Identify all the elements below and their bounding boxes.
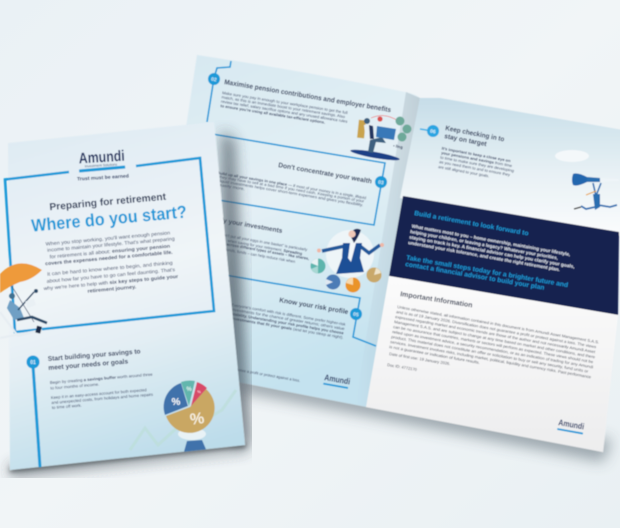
step 02 body text: match, as this is an immediate boost to your retirement savings. Also xyxy=(221,94,345,119)
step 02 heading: Maximise pension contributions and employer benefits xyxy=(224,79,392,114)
pie chart: % xyxy=(197,389,201,394)
band heading: Build a retirement to look forward to xyxy=(414,210,529,238)
intro text: about how far you have to go can feel daunting. That's xyxy=(46,267,176,285)
frame: cover box xyxy=(5,158,214,332)
cloud xyxy=(555,150,589,162)
panel: right inner page xyxy=(366,98,620,452)
illustration: figure holding dart xyxy=(572,173,619,210)
step 05 heading: Know your risk profile xyxy=(279,297,349,316)
step 06 body text: as you need them to and to ensure they xyxy=(439,159,511,177)
panel: important information background xyxy=(366,276,618,452)
band body text: helping your children, or leaving a legacy? Whatever your priorities, xyxy=(410,229,558,261)
band body text: What matters most to you – home ownership, maintaining your lifestyle, xyxy=(411,224,571,257)
disclaimer text: is not a guarantee or indication of future results. xyxy=(389,344,480,365)
step 01 body text: Begin by creating a savings buffer worth around three xyxy=(50,372,154,385)
step 04 body text: Don't put all your eggs in one basket" is particularly xyxy=(220,232,308,252)
disclaimer text: Unless otherwise stated, all information contained in this document is from Amundi Asset Management S.A.S. xyxy=(397,304,600,345)
intro text: retirement journey. xyxy=(87,284,137,295)
band body text: staying on track is key. A financial advisor can help you clarify your goals, xyxy=(409,235,575,269)
connector: step 06 xyxy=(420,129,432,131)
step 06 body text: to time to make sure they are developing xyxy=(440,155,514,173)
step 06 number badge xyxy=(427,125,439,137)
intro text xyxy=(43,230,178,295)
step 01 number badge xyxy=(26,356,40,368)
front cover xyxy=(0,122,250,476)
step 04 body text xyxy=(220,232,310,264)
step 01 body text: to time off work. xyxy=(52,403,82,410)
band: navy call to action xyxy=(389,196,619,315)
step 04 body text: across different types of assets – like shares, xyxy=(226,241,310,261)
watermark: chart line xyxy=(130,390,236,450)
disclaimer text: expressed regarding market and economic trends are those of the author and not necessarily Amundi Asset xyxy=(395,314,597,354)
disclaimer text: Doc ID: 4772170 xyxy=(387,362,418,372)
pie chart: % xyxy=(172,397,181,408)
step 03 body text: liquid investments helps cover short-term expenses and gives you flexibility. xyxy=(219,178,364,207)
step 06 heading: Keep checking in to xyxy=(445,125,505,143)
booklet: open inner spread xyxy=(150,55,620,462)
pie chart: % xyxy=(186,387,192,393)
shadow: front cover xyxy=(10,130,250,476)
pie chart xyxy=(164,380,215,452)
step 06 heading: stay on target xyxy=(444,133,488,148)
step 06 body text: your pensions and savings from time xyxy=(441,150,513,168)
intro text: why we're here to help with six key steps to guide your xyxy=(43,274,178,292)
heading: preparing for retirement: Preparing for retirement xyxy=(49,192,167,213)
step 04 body text: bonds, funds – can help reduce risk when xyxy=(224,247,296,264)
frame: step 05 box xyxy=(225,275,376,346)
disclaimer text: services. Investment involves risks, including market, political, liquidity and currency risks. Past performance xyxy=(390,339,592,379)
spine shading xyxy=(355,92,420,407)
band call to action: contact a financial advisor to build your plan xyxy=(405,261,545,292)
intro text: When you stop working, you'll want enough pension xyxy=(45,230,171,248)
step 02 number badge: 02 xyxy=(211,77,217,83)
step 03 number badge: 03 xyxy=(378,180,384,186)
pie pedestal xyxy=(184,440,206,452)
step 05 body text: stability. Understanding your risk profile helps you choose xyxy=(231,311,345,336)
intro text: covers the expenses needed for a comfortable life. xyxy=(45,250,174,267)
step 04 heading: Diversify your investments xyxy=(199,213,283,235)
disclaimer text xyxy=(387,304,600,379)
step 04 body text: when saving for your retirement. Spreading xyxy=(227,238,303,256)
step 01 body text xyxy=(50,372,154,410)
disclaimer text: Date of first use: 19 January 2026. xyxy=(389,351,451,366)
step 01 body text: and unexpected costs, from holidays and home repairs xyxy=(51,392,153,405)
pie: gold xyxy=(366,268,382,282)
step 06 body text: are still aligned to your goals. xyxy=(438,164,490,178)
step 05 body text: investments that fit your goals (and let you sleep at night). xyxy=(231,316,344,340)
step 02 number badge xyxy=(208,73,220,85)
step 02 body text: Make sure you pay in enough to your workplace pension to get the full xyxy=(222,90,348,115)
disclaimer text: relied upon as investment advice, a security recommendation, or as an indication of trading for any Amundi xyxy=(392,329,594,369)
pie: blue xyxy=(325,274,340,290)
step 05 body text xyxy=(231,302,346,340)
step 01 number badge: 01 xyxy=(30,360,36,366)
heading: where do you start: Where do you start? xyxy=(30,201,188,236)
intro text: income to maintain your lifestyle. That's what preparing xyxy=(47,236,175,254)
page: left background xyxy=(150,55,420,407)
step 05 number badge: 05 xyxy=(353,312,359,318)
step 01 heading: meet your needs or goals xyxy=(48,358,129,372)
band body text xyxy=(408,224,575,272)
illustration: woman with pie charts xyxy=(310,229,384,292)
step 02 body text: review tax relief, salary sacrifice options and any unused allowance rules xyxy=(221,99,348,124)
logo: right page: Amundi xyxy=(558,417,585,431)
step 02 body text: to ensure you're using all available tax-efficient options. xyxy=(220,103,326,125)
page: cover background xyxy=(8,122,245,470)
step 03 body text: they may have to sell at a bad time if you need cash. Keeping a portion of your xyxy=(219,174,365,204)
page: sky top xyxy=(400,98,620,236)
disclaimer text: and is as of 19 January 2026. Diversification does not guarantee a profit or protect against a loss. The views xyxy=(396,309,597,349)
heading: important information: Important Information xyxy=(400,291,473,309)
logo: Amundi: Amundi xyxy=(78,148,125,167)
panel: left inner page xyxy=(150,55,420,407)
logo: Amundi: Investment Solutions xyxy=(85,162,118,168)
step 03 number badge xyxy=(375,176,387,188)
step 03 heading: Don't concentrate your wealth xyxy=(278,162,372,185)
step 01 body text: to four months of income. xyxy=(50,381,99,390)
step 01 heading: Start building your savings to xyxy=(48,348,141,363)
step 03 body text: easily more. xyxy=(219,182,245,191)
logo: Amundi: Trust must be earned xyxy=(77,173,129,183)
pie chart: % xyxy=(189,410,205,429)
logo: Amundi xyxy=(77,148,129,183)
pie: teal xyxy=(310,258,326,274)
step 05 number badge xyxy=(350,308,362,320)
band body text: understand your risk tolerance, and create the right retirement plan. xyxy=(408,240,560,272)
illustration: person at desk xyxy=(350,116,412,162)
step 01 body text: Keep it in an easy-access account for both expected xyxy=(51,387,147,400)
footnote: guarantee a profit or protect against a loss. xyxy=(229,367,301,383)
step 06 body text: It's important to keep a close eye on xyxy=(441,146,512,163)
illustration: person at desk: • ling xyxy=(393,143,404,150)
disclaimer text: can be no assurance that countries, markets or sectors will perform as expected. These views should not be xyxy=(393,324,594,364)
intro text: for retirement is all about: ensuring your pension xyxy=(49,244,170,260)
disclaimer text: product. This material does not constitute an offer or solicitation to buy or sell any security, fund units or xyxy=(391,334,589,374)
step 06 body text xyxy=(438,146,514,178)
band call to action: Take the small steps today for a brighter future and xyxy=(406,255,568,289)
shadow: spread xyxy=(240,372,612,462)
frame: step 03 box xyxy=(212,134,385,225)
frame: step 02 and 03 xyxy=(207,61,231,122)
step 03 body text: Build up all your savings in one place — If most of your money is in a single, illiquid xyxy=(217,170,367,200)
step 05 body text: investments for the chance of greater returns; others value xyxy=(231,307,345,331)
disclaimer text: Management S.A.S. and are subject to change at any time based on market and other conditions, and there xyxy=(394,319,596,359)
step 06 number badge: 06 xyxy=(430,129,436,135)
step 05 body text: Everyone's comfort with risk is different. Some prefer higher-risk xyxy=(231,302,346,327)
shadow: front cover contact xyxy=(10,443,246,472)
step 01 timeline xyxy=(33,366,40,467)
logo: left page: Amundi xyxy=(324,372,351,386)
step 01 heading xyxy=(48,348,141,372)
pie: orange xyxy=(346,278,360,292)
step 02 body text xyxy=(220,90,348,125)
intro text: It can be hard to know where to begin, and thinking xyxy=(47,260,173,278)
illustration: person under umbrella xyxy=(0,263,47,338)
